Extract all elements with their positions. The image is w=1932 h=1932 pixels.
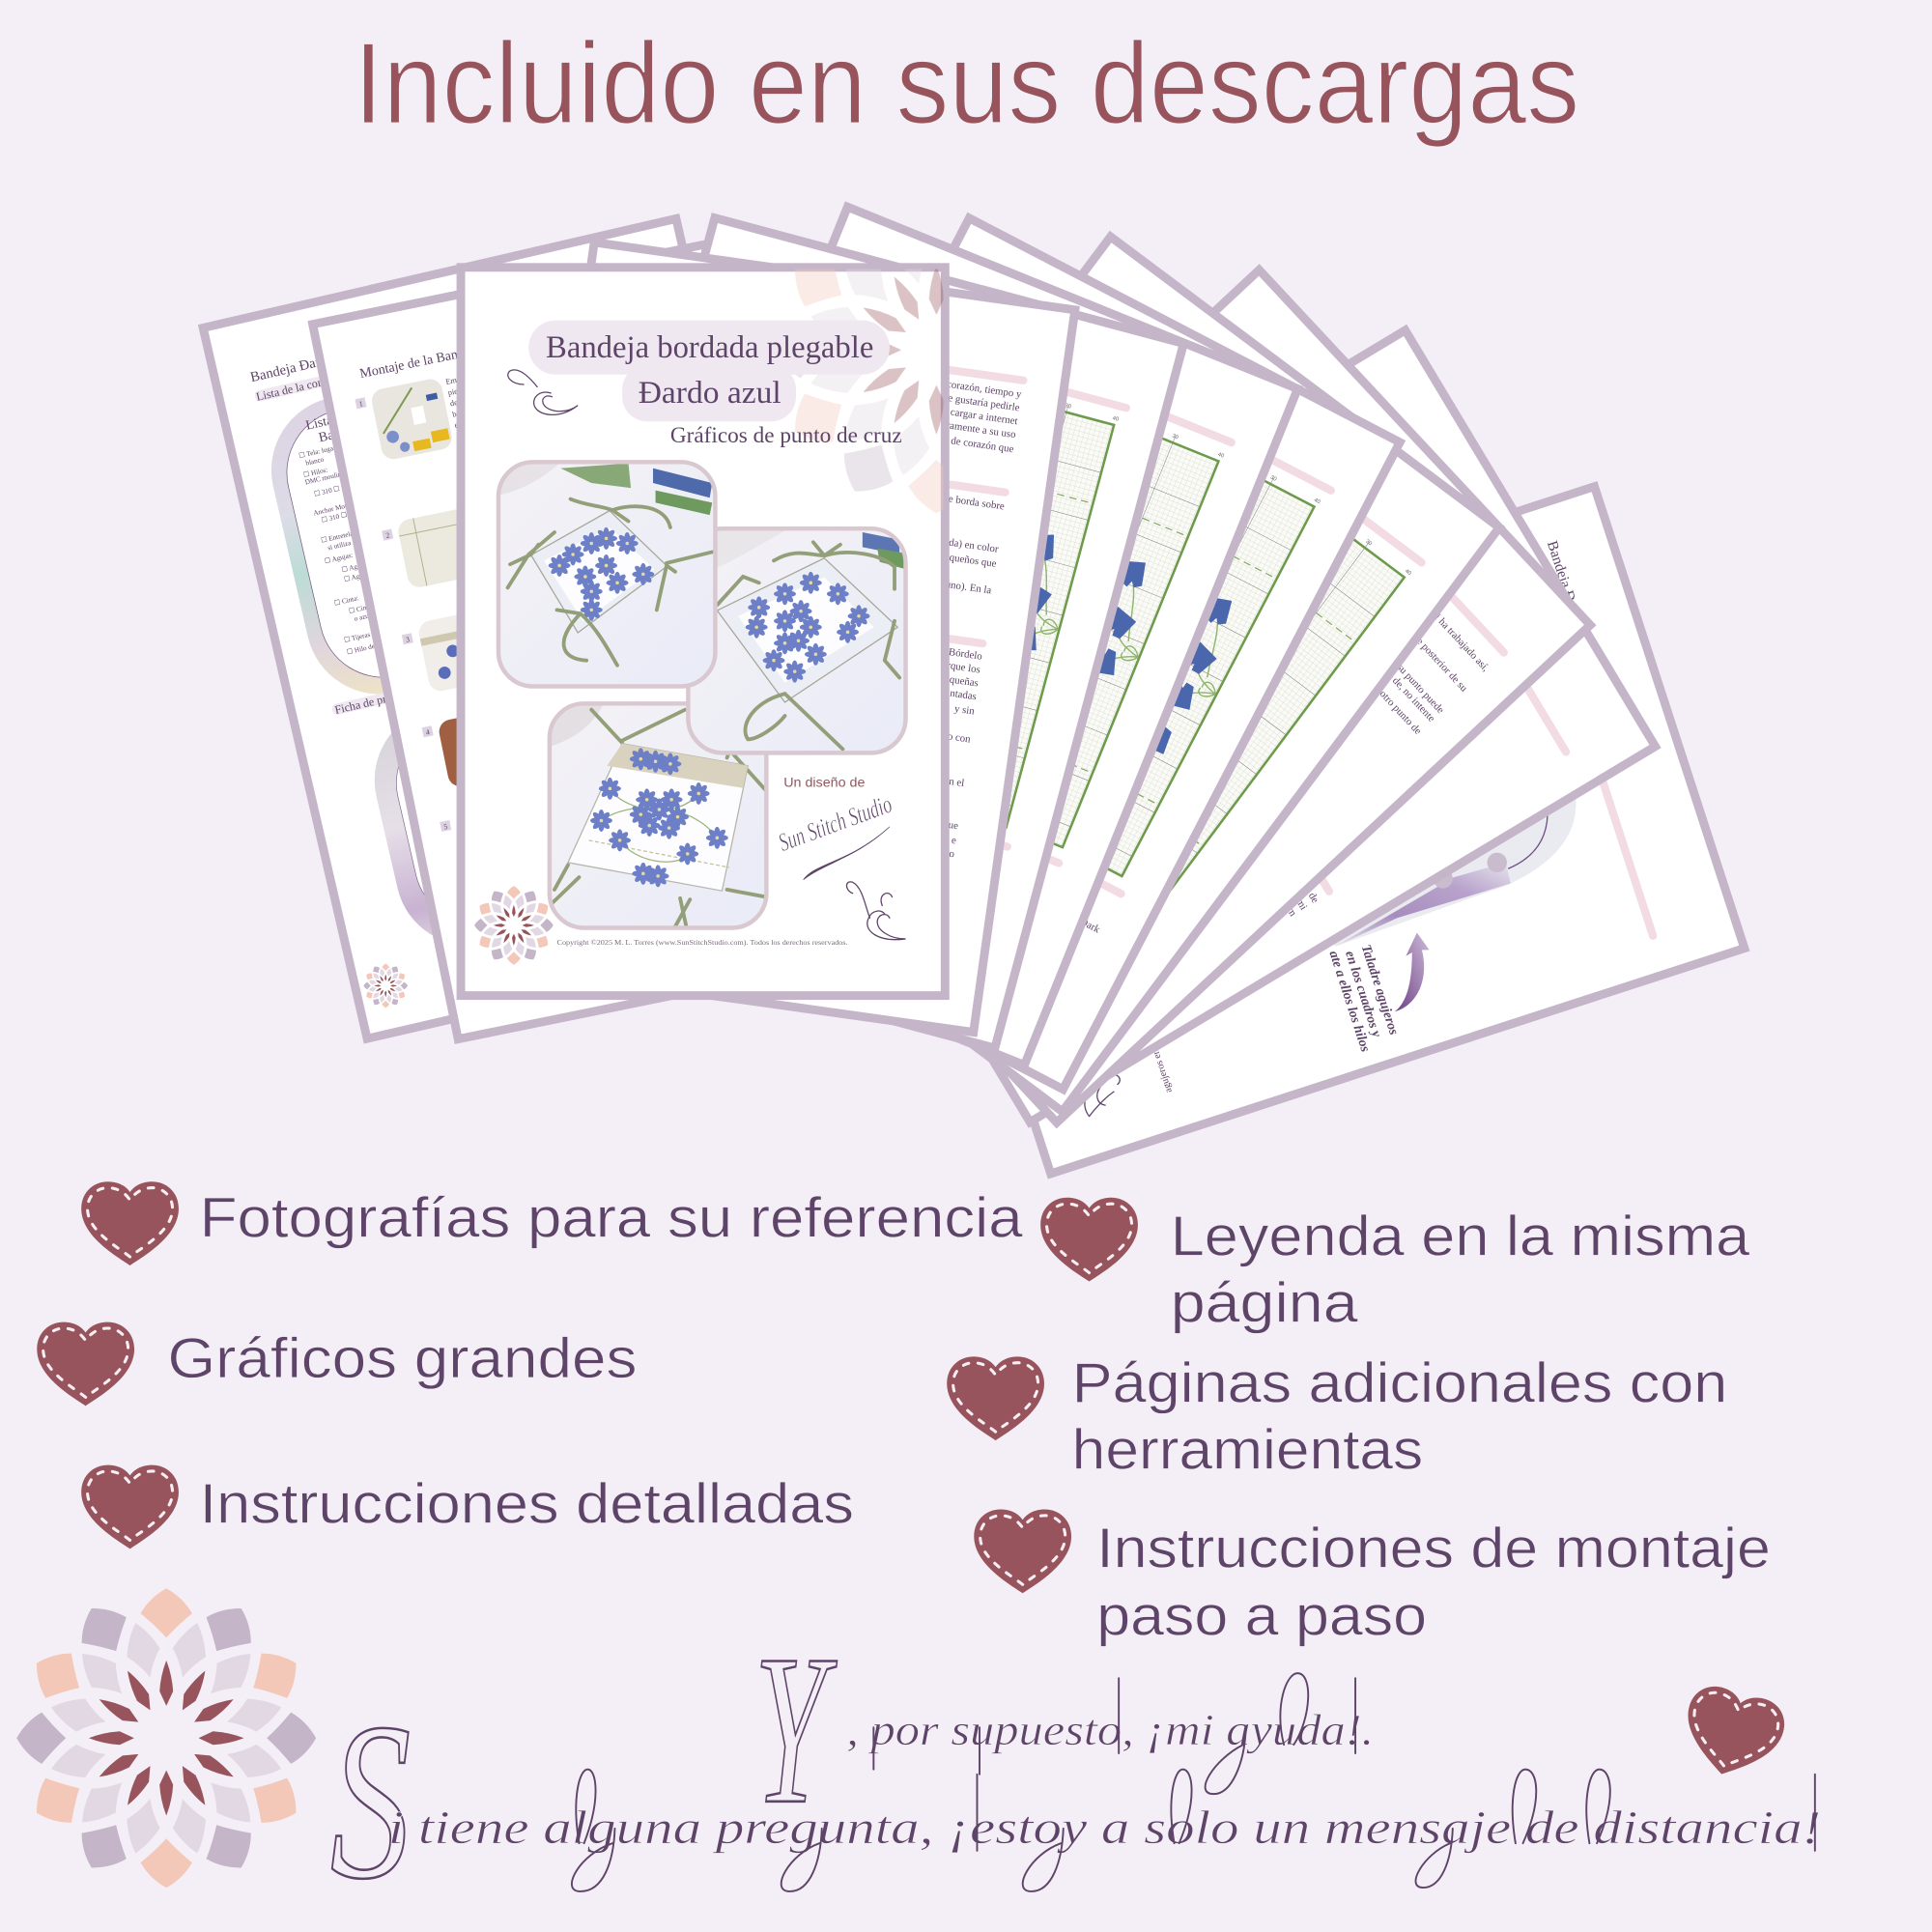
designer credit bbox=[775, 775, 895, 880]
closing script line 2: S bbox=[330, 1677, 411, 1925]
page: extra tools page: m bbox=[1285, 905, 1299, 919]
bullet: charts: Gráficos grandes bbox=[167, 1327, 637, 1390]
page: materials list (far left): Ficha de proyecto bbox=[333, 685, 418, 717]
page: chart 3: Ivory Dark bbox=[1056, 904, 1102, 936]
page: chart 3 bbox=[633, 218, 1400, 1090]
page: assembly steps: 5 bbox=[443, 822, 448, 831]
bullet: legend bbox=[1040, 1198, 1750, 1335]
page: back-of-work notes: su punto puede bbox=[1395, 662, 1446, 716]
page: introduction text: cargar a internet bbox=[950, 407, 1018, 427]
page: materials list (far left): ☐ Cinta: bbox=[333, 594, 359, 608]
page: far-right drilling instructions: Bandeja Đardo azul bbox=[1544, 539, 1596, 656]
page: materials list (far left): blanco bbox=[305, 455, 325, 468]
page: materials list (far left): ☐ 310 ☐ M bbox=[313, 483, 349, 498]
bullet: instructions bbox=[81, 1465, 854, 1548]
page: assembly steps: 1 bbox=[358, 399, 364, 409]
page: materials list (far left): ☐ 310 ☐ bbox=[321, 511, 348, 525]
page: back-of-work notes: parte posterior de su bbox=[1403, 624, 1470, 695]
page: introduction text: corazón, tiempo y bbox=[946, 379, 1023, 401]
page: extra tools page: mi bbox=[1293, 896, 1309, 912]
icon: large mandala bbox=[16, 1588, 316, 1888]
page: assembly steps: borde bbox=[451, 407, 471, 419]
bullet: photos: Fotografías para su referencia bbox=[200, 1187, 1023, 1250]
closing script line 1 bbox=[754, 1610, 1374, 1848]
icon: cover watermark mandala bbox=[795, 269, 943, 514]
page: introduction text: de corazón que bbox=[951, 435, 1014, 455]
page: materials list (far left): si utiliza la bbox=[327, 537, 359, 552]
designer credit: Un diseño de bbox=[783, 775, 866, 790]
page: chart 1: Dark bbox=[971, 877, 994, 894]
cover title: Đardo azul bbox=[639, 375, 781, 411]
icon: small mandala on list page bbox=[363, 963, 408, 1008]
icon: cover flourish top bbox=[508, 370, 578, 414]
arrow: curved purple arrow bbox=[1395, 933, 1430, 1011]
page: introduction text: ramente a su uso bbox=[946, 419, 1016, 440]
page: introduction text: de gustaría pedirle bbox=[942, 391, 1020, 413]
page: chart 1 bbox=[526, 218, 1183, 1048]
cover title bbox=[528, 321, 902, 447]
icon: cover flourish bottom bbox=[846, 882, 906, 940]
page: materials list (far left) bbox=[203, 218, 840, 1038]
page: introduction text: o bbox=[949, 848, 955, 860]
page: materials list (far left): ☐ Aguja de bbox=[343, 569, 377, 583]
page: front cover bbox=[456, 263, 950, 1001]
page: materials list (far left): DMC mouliné bbox=[304, 469, 345, 486]
page: materials list (far left): o azul bbox=[354, 611, 372, 623]
page: back-of-work notes bbox=[725, 270, 1590, 1122]
page: assembly steps: pieza bbox=[447, 385, 466, 397]
page: extra tools page bbox=[780, 330, 1656, 1122]
closing script line 2 bbox=[330, 1677, 1821, 1925]
designer credit: Sun Stitch Studio bbox=[775, 789, 895, 857]
page: back-of-work notes: otro punto de bbox=[1378, 688, 1424, 737]
text block: drill instruction: en los cuadros y bbox=[1342, 949, 1384, 1039]
closing script line 2: i tiene alguna pregunta, ¡estoy a solo un mensaje de distancia! bbox=[388, 1803, 1821, 1854]
bullet: legend: página bbox=[1171, 1272, 1358, 1335]
photo: tray 1 bbox=[497, 462, 715, 686]
text block: drill instruction bbox=[1325, 943, 1402, 1054]
bullet: legend: Leyenda en la misma bbox=[1171, 1206, 1750, 1268]
page: materials list (far left): ☐ Cinta bbox=[348, 603, 373, 615]
page: assembly steps: Montaje de la Bandeja bbox=[358, 342, 482, 382]
page: materials list (far left): ☐ Hilo de coser bbox=[346, 639, 392, 656]
title: Incluido en sus descargas bbox=[354, 19, 1579, 149]
bullet: additional pages bbox=[947, 1352, 1727, 1481]
bullet: photos bbox=[81, 1181, 1023, 1265]
panel: fan of document pages bbox=[203, 186, 1745, 1174]
page: introduction text: queñas bbox=[949, 673, 980, 689]
icon: cover mandala bbox=[474, 886, 554, 965]
page: introduction text: o con bbox=[947, 730, 972, 746]
closing script line 1: , por supuesto, ¡mi ayuda!. bbox=[846, 1705, 1374, 1754]
bullet: assembly: paso a paso bbox=[1096, 1585, 1427, 1648]
page: extra tools page: de bbox=[1306, 891, 1321, 905]
page: introduction text: da) en color bbox=[948, 537, 1000, 555]
page: far-right drilling instructions bbox=[900, 487, 1745, 1174]
icon: flourish on far-right page bbox=[1085, 1075, 1120, 1117]
page: materials list (far left): Bandeja Đardo azul bbox=[249, 345, 362, 385]
photo: tray 2 bbox=[688, 528, 906, 753]
bullet: charts bbox=[37, 1322, 637, 1406]
bullet: additional pages: Páginas adicionales con bbox=[1072, 1352, 1727, 1415]
page: introduction text: n el bbox=[949, 776, 965, 789]
page: assembly steps: en bbox=[454, 419, 464, 430]
page: assembly steps: 3 bbox=[405, 635, 411, 644]
page: far-right drilling instructions: agujeros en los bbox=[1147, 1035, 1175, 1094]
text block: drill instruction: Taladre agujeros bbox=[1358, 943, 1402, 1037]
page: materials list (far left): ☐ Agujas: bbox=[324, 552, 354, 565]
page: materials list (far left): Bandeja bbox=[317, 420, 364, 445]
page: introduction text: ue bbox=[948, 819, 959, 832]
cover title: Bandeja bordada plegable bbox=[546, 329, 873, 365]
icon: tilted heart bbox=[1674, 1681, 1790, 1787]
page: materials list (far left): Lista de la compra bbox=[255, 371, 343, 404]
page: introduction text: se borda sobre bbox=[944, 493, 1006, 513]
page: materials list (far left): ☐ Tijeras afiladas bbox=[343, 625, 394, 644]
page: materials list (far left): ☐ Entretela adhesiva bbox=[321, 524, 380, 545]
closing script line 1: Y bbox=[754, 1610, 838, 1848]
page: materials list (far left): ☐ Aguja de bbox=[341, 559, 375, 574]
cover title: Gráficos de punto de cruz bbox=[670, 423, 902, 447]
photo: tray 3 bbox=[550, 703, 766, 927]
page: materials list (far left): Anchor Mouliné bbox=[313, 499, 359, 517]
page: introduction text bbox=[493, 242, 1075, 1033]
bullet: additional pages: herramientas bbox=[1072, 1418, 1423, 1481]
page: assembly steps bbox=[313, 235, 900, 1039]
page: assembly steps: 2 bbox=[385, 530, 390, 540]
bullet: instructions: Instrucciones detalladas bbox=[200, 1473, 854, 1536]
page: introduction text: y sin bbox=[953, 703, 976, 718]
page: assembly steps: dejar bbox=[449, 396, 467, 408]
page: chart 2 bbox=[574, 207, 1297, 1065]
page: introduction text: ntadas bbox=[950, 688, 978, 702]
page: materials list (far left): Lista de bbox=[304, 409, 350, 434]
page: chart 4 bbox=[673, 237, 1499, 1112]
page: back-of-work notes: de, no intente bbox=[1390, 675, 1437, 724]
page: introduction text: uno). En la bbox=[945, 579, 992, 597]
page: materials list (far left): ☐ Tela: lugana bbox=[298, 442, 341, 460]
copyright: Copyright ©2025 M. L. Torres (www.SunStitchStudio.com). Todos los derechos reservados. bbox=[557, 939, 848, 947]
page: chart 3: m bbox=[1067, 931, 1081, 946]
page: assembly steps: 4 bbox=[425, 727, 431, 737]
page: back-of-work notes: si ha trabajado así, bbox=[1430, 609, 1492, 674]
page: materials list (far left): ☐ Hilos: bbox=[302, 466, 328, 479]
text block: drill instruction: ate a ellos los hilos bbox=[1325, 949, 1374, 1054]
page: introduction text: Bórdelo bbox=[948, 646, 982, 663]
page: introduction text: queños que bbox=[949, 552, 997, 570]
bullet: assembly bbox=[974, 1509, 1771, 1648]
page: introduction text: e bbox=[951, 835, 957, 846]
page: assembly steps: Empiece bbox=[445, 372, 474, 386]
page: introduction text: rque los bbox=[947, 660, 981, 676]
bullet: assembly: Instrucciones de montaje bbox=[1096, 1517, 1771, 1579]
